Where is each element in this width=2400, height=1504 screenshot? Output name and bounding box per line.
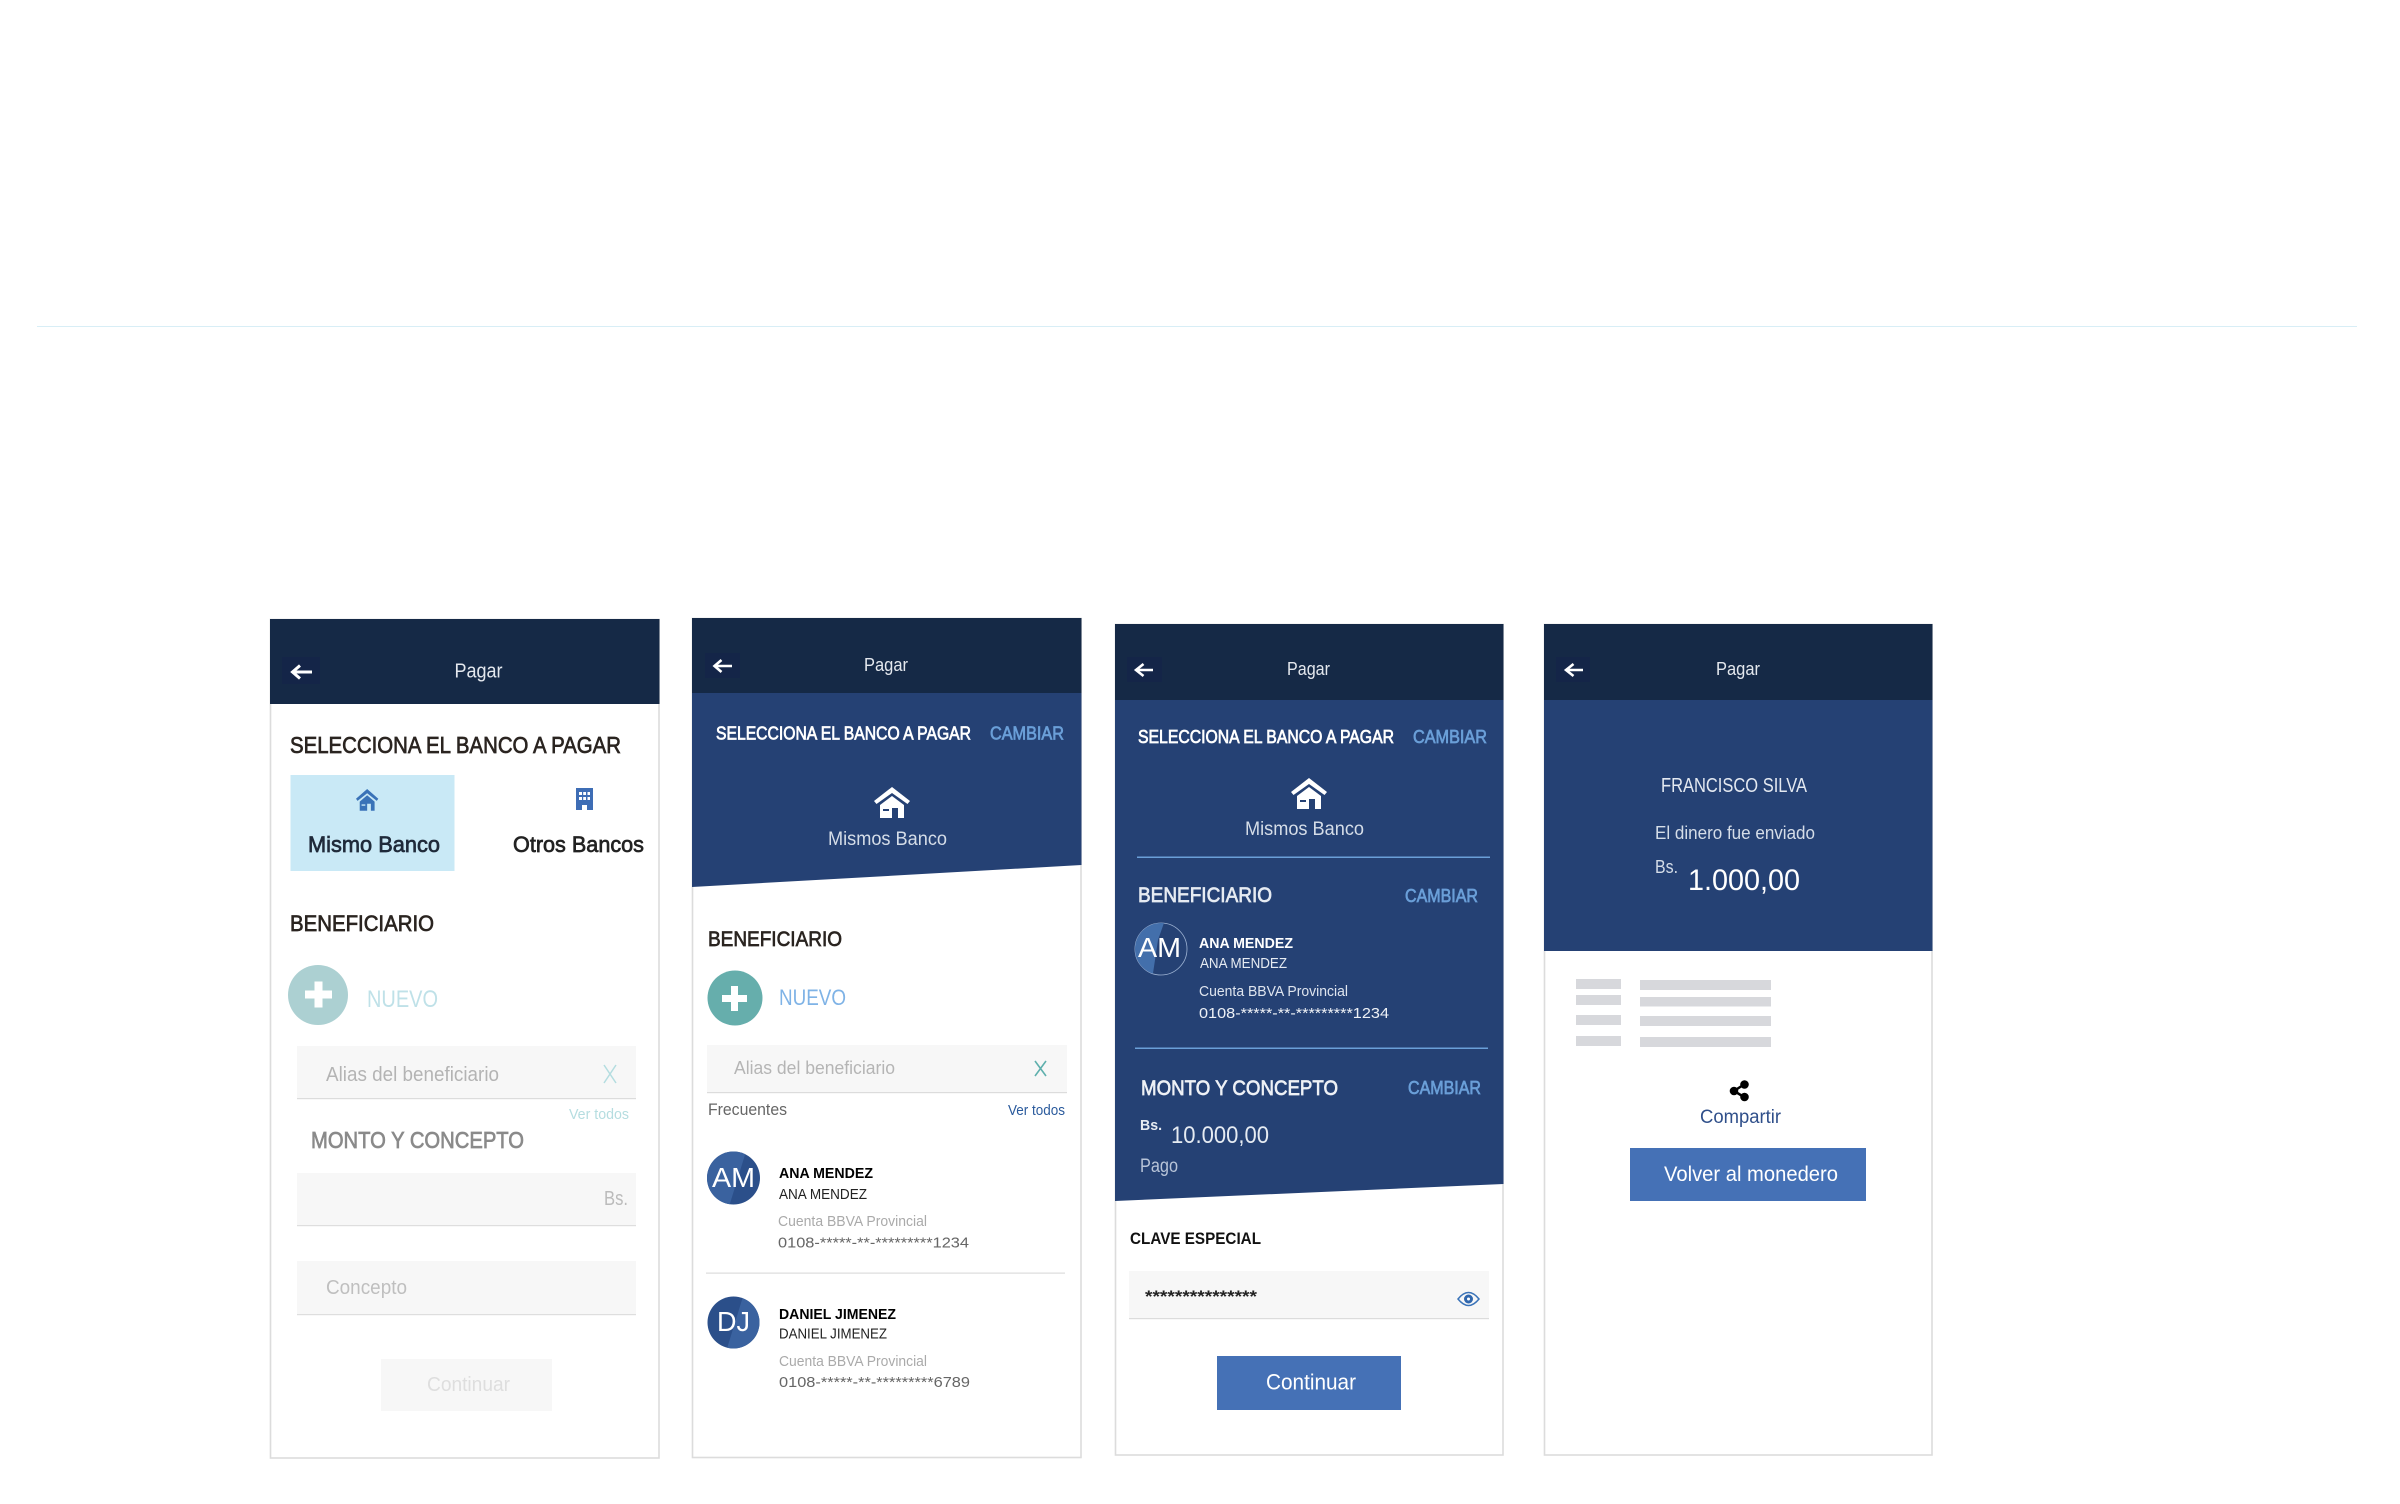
input: alias: Alias del beneficiario [326, 1064, 499, 1086]
option: mismo banco [290, 775, 454, 871]
blue summary band: SELECCIONA EL BANCO A PAGAR [716, 724, 971, 744]
input: alias [297, 1046, 636, 1099]
header bar [692, 618, 1082, 693]
icon: share [1730, 1080, 1749, 1101]
section: monto: Bs. [1140, 1117, 1162, 1134]
section: beneficiario [1130, 884, 1478, 1022]
link: ver todos: Ver todos [1008, 1102, 1065, 1119]
heading: select bank: SELECCIONA EL BANCO A PAGAR [290, 732, 621, 758]
blue summary band [1115, 700, 1504, 1201]
header bar [1544, 624, 1932, 700]
contact: daniel jimenez: DJ [717, 1306, 750, 1337]
button: volver al monedero [1630, 1148, 1866, 1201]
blue summary band [692, 693, 1082, 887]
input: monto [297, 1173, 636, 1226]
link: compartir: Compartir [1700, 1107, 1782, 1128]
header bar: Pagar [454, 661, 503, 683]
heading: monto y concepto: MONTO Y CONCEPTO [311, 1127, 524, 1153]
label: frecuentes: Frecuentes [708, 1101, 787, 1119]
blue confirmation block: 1.000,00 [1688, 864, 1800, 897]
button: nuevo: NUEVO [779, 985, 846, 1010]
contact: ana mendez [707, 1152, 968, 1248]
section: beneficiario: AM [1138, 932, 1181, 963]
button: nuevo [288, 965, 438, 1025]
input: password: *************** [1145, 1287, 1257, 1306]
app flow infographic [37, 326, 2357, 1459]
blue summary band: Mismos Banco [828, 829, 947, 850]
icon: eye [1458, 1292, 1479, 1306]
heading: clave especial: CLAVE ESPECIAL [1130, 1229, 1261, 1248]
input: alias [707, 1045, 1067, 1093]
option: mismo banco: Mismo Banco [308, 832, 440, 857]
contact: ana mendez: ANA MENDEZ [779, 1166, 873, 1182]
section: bank: Mismos Banco [1245, 819, 1364, 840]
blue summary band: CAMBIAR [990, 724, 1064, 744]
header bar [1115, 624, 1504, 700]
section: beneficiario: ANA MENDEZ [1199, 936, 1293, 952]
input: concepto [297, 1261, 636, 1315]
button: nuevo [708, 970, 846, 1026]
option: otros bancos [513, 788, 644, 857]
contact: daniel jimenez: Cuenta BBVA Provincial [779, 1353, 927, 1370]
section: bank: SELECCIONA EL BANCO A PAGAR [1138, 727, 1394, 747]
section: beneficiario: ANA MENDEZ [1200, 956, 1287, 972]
input: password [1129, 1271, 1489, 1319]
blue confirmation block: Bs. [1655, 857, 1678, 877]
section: monto: Pago [1140, 1156, 1178, 1177]
blue confirmation block: El dinero fue enviado [1655, 823, 1815, 843]
contact: daniel jimenez: 0108-*****-**-*********6789 [779, 1374, 970, 1391]
section: bank [1138, 727, 1487, 840]
contact: daniel jimenez [708, 1296, 970, 1387]
header bar: Pagar [1716, 659, 1760, 679]
section: monto [1140, 1076, 1481, 1177]
button: continuar disabled [381, 1359, 552, 1411]
contact: ana mendez: AM [712, 1162, 755, 1193]
button: continuar disabled: Continuar [427, 1374, 510, 1396]
button: continuar [1217, 1356, 1401, 1410]
button: volver al monedero: Volver al monedero [1664, 1163, 1838, 1186]
button: nuevo: NUEVO [367, 986, 438, 1013]
panel: screen 1 select bank [270, 619, 660, 1458]
contact: ana mendez: 0108-*****-**-*********1234 [778, 1235, 969, 1252]
heading: beneficiario: BENEFICIARIO [290, 911, 434, 936]
link: ver todos: Ver todos [569, 1106, 629, 1123]
blue confirmation block [1544, 700, 1932, 951]
input: concepto: Concepto [326, 1277, 407, 1299]
heading: beneficiario: BENEFICIARIO [708, 928, 842, 951]
input: alias: Alias del beneficiario [734, 1057, 895, 1078]
section: monto: MONTO Y CONCEPTO [1141, 1076, 1338, 1100]
input: monto: Bs. [604, 1188, 628, 1210]
receipt placeholder lines [1576, 979, 1771, 1047]
section: monto: CAMBIAR [1408, 1078, 1481, 1098]
button: continuar: Continuar [1266, 1370, 1356, 1395]
section: beneficiario: BENEFICIARIO [1138, 884, 1272, 907]
contact: daniel jimenez: DANIEL JIMENEZ [779, 1307, 896, 1323]
panel: screen 2 beneficiary [692, 618, 1082, 1458]
section: beneficiario: CAMBIAR [1405, 886, 1478, 906]
header bar [270, 619, 660, 704]
contact: daniel jimenez: DANIEL JIMENEZ [779, 1327, 887, 1343]
option: otros bancos: Otros Bancos [513, 832, 644, 857]
panel: screen 3 confirm [1115, 624, 1504, 1455]
header bar: Pagar [864, 655, 908, 675]
panel: screen 4 success [1544, 624, 1932, 1455]
contact: ana mendez: Cuenta BBVA Provincial [778, 1213, 927, 1230]
section: bank: CAMBIAR [1413, 727, 1487, 747]
section: beneficiario: Cuenta BBVA Provincial [1199, 983, 1348, 1000]
contact: ana mendez: ANA MENDEZ [779, 1187, 867, 1203]
header bar: Pagar [1287, 659, 1330, 679]
blue confirmation block: FRANCISCO SILVA [1661, 775, 1808, 797]
section: beneficiario: 0108-*****-**-*********1234 [1199, 1005, 1389, 1022]
section: monto: 10.000,00 [1171, 1122, 1269, 1149]
